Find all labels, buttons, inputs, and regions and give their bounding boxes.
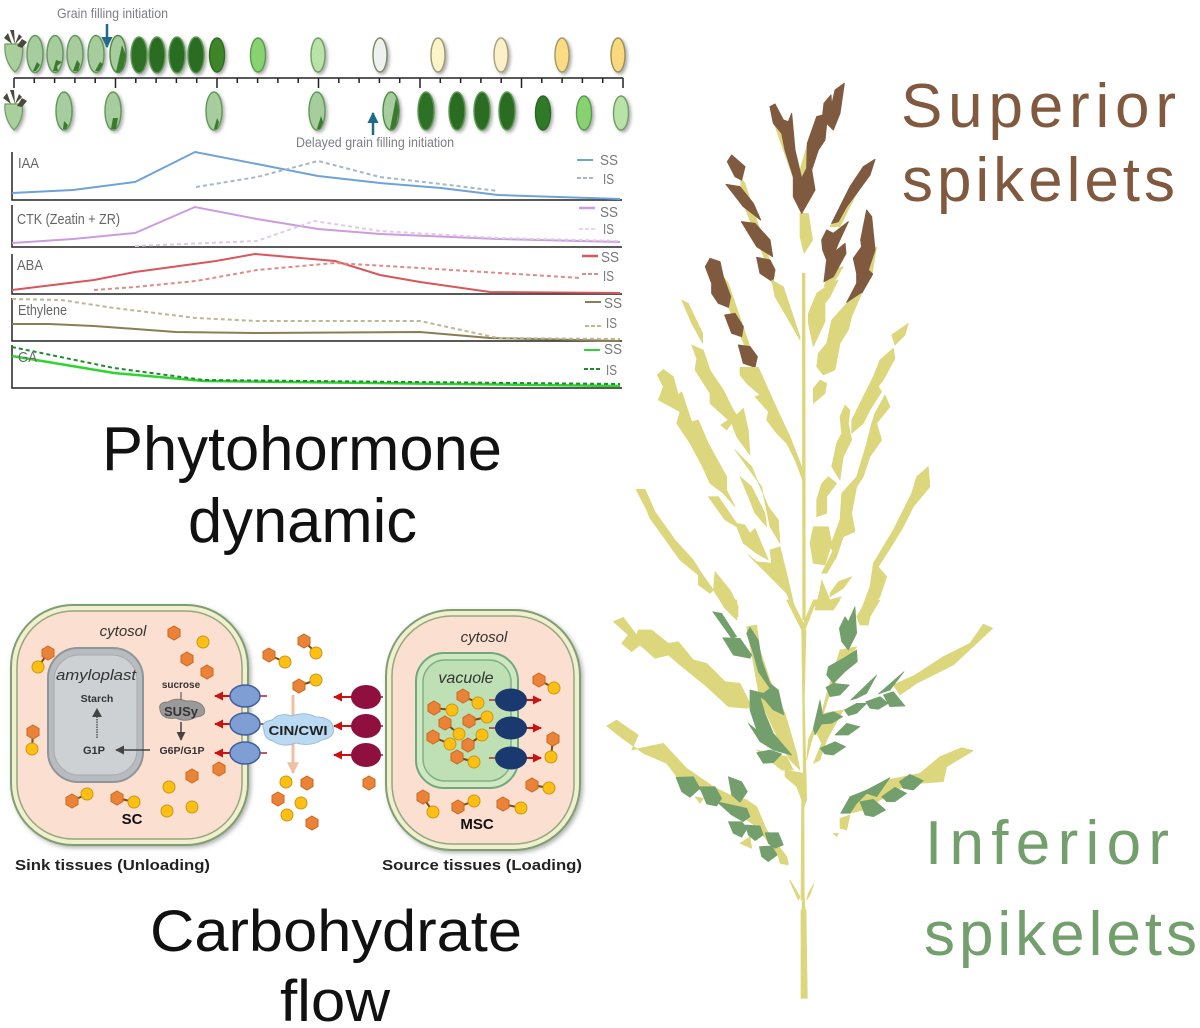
chart: Ethylene: SS	[604, 295, 622, 312]
pathway: starch synthesis: Starch	[81, 693, 113, 705]
chart: GA: SS	[604, 341, 622, 358]
pathway: starch synthesis	[81, 680, 205, 757]
middle yellow branches	[636, 273, 930, 620]
chart: IAA	[12, 152, 622, 200]
bottom row of grains	[56, 92, 628, 130]
molecules in sink cell	[26, 626, 225, 817]
time axis	[14, 78, 623, 88]
caption: sink tissues: Sink tissues (Unloading)	[15, 858, 210, 874]
vacuole transporters	[489, 688, 541, 770]
heading: Carbohydrate flow	[150, 899, 522, 1028]
top row of grains	[27, 36, 625, 73]
green inferior spikelets	[676, 607, 923, 862]
arrow: apoplast flow	[292, 695, 294, 773]
chart: CTK: IS	[603, 221, 614, 238]
heading: Inferior spikelets: spikelets	[924, 900, 1197, 969]
molecules in source cell	[417, 673, 560, 818]
heading: Phytohormone dynamic	[102, 415, 502, 556]
molecules in apoplast	[263, 634, 375, 830]
chart: Ethylene: IS	[606, 315, 617, 332]
heading: Inferior spikelets	[924, 809, 1197, 969]
chart: ABA: IS	[603, 268, 614, 285]
chart: CTK: CTK (Zeatin + ZR)	[17, 211, 120, 228]
chart: IAA: SS	[600, 152, 618, 169]
chart: IAA: IS	[603, 171, 614, 188]
brown superior spikelets	[705, 83, 875, 367]
illustration: rice panicle	[607, 83, 993, 998]
amyloplast: amyloplast	[56, 667, 137, 684]
icon: superior spikelet flower	[4, 30, 27, 72]
sink transporters	[215, 685, 267, 764]
amyloplast	[48, 648, 143, 782]
pathway: starch synthesis: G6P/G1P	[160, 745, 204, 757]
icon: inferior spikelet flower	[3, 90, 27, 130]
label: MSC: MSC	[460, 816, 494, 833]
top row grain fill stains	[33, 45, 126, 72]
arrow: grain filling initiation	[106, 24, 108, 47]
label: grain filling initiation: Grain filling initiation	[57, 5, 168, 21]
panel: grain development timeline	[3, 5, 628, 150]
chart: Ethylene	[12, 295, 622, 341]
vacuole	[416, 653, 518, 788]
panel: sink cell	[11, 605, 248, 845]
chart: Ethylene: Ethylene	[18, 302, 67, 319]
label: delayed grain filling initiation: Delayed grain filling initiation	[296, 134, 454, 150]
chart: ABA: ABA	[17, 257, 43, 274]
vacuole: vacuole	[438, 670, 494, 687]
panel: hormone line charts	[12, 152, 622, 388]
label: cytosol: cytosol	[100, 623, 147, 640]
enzyme cloud: CIN/CWI: CIN/CWI	[268, 723, 328, 738]
heading: Phytohormone dynamic: Phytohormone	[102, 415, 502, 484]
lower yellow branches	[607, 600, 993, 998]
label: cytosol: cytosol	[461, 629, 508, 646]
pathway: starch synthesis: SUSy	[164, 704, 199, 719]
chart: CTK	[12, 204, 622, 247]
chart: IAA: IAA	[18, 155, 39, 172]
arrow: delayed grain filling initiation	[372, 113, 374, 135]
chart: GA	[12, 341, 622, 388]
caption: source tissues: Source tissues (Loading)	[382, 858, 582, 874]
upper panicle rachis behind brown spikelets	[723, 107, 877, 347]
chart: ABA: SS	[601, 249, 619, 266]
chart: GA: GA	[18, 349, 37, 366]
heading: Carbohydrate flow: Carbohydrate	[150, 899, 522, 964]
panel: source cell	[386, 610, 580, 850]
chart: CTK: SS	[600, 204, 618, 221]
pathway: starch synthesis: sucrose	[162, 680, 201, 691]
chart: GA: IS	[606, 362, 617, 379]
heading: Inferior spikelets: Inferior	[925, 809, 1169, 878]
bottom row grain fill stains	[63, 98, 399, 129]
heading: Superior spikelets: spikelets	[902, 146, 1175, 215]
label: SC: SC	[122, 811, 143, 828]
heading: Superior spikelets: Superior	[901, 72, 1176, 141]
panel: carbohydrate flow diagram	[11, 605, 582, 874]
heading: Superior spikelets	[901, 72, 1176, 215]
heading: Phytohormone dynamic: dynamic	[188, 487, 417, 556]
pathway: starch synthesis: G1P	[83, 745, 105, 757]
chart: ABA	[12, 249, 622, 294]
enzyme cloud: CIN/CWI	[263, 714, 334, 745]
source transporters	[334, 685, 383, 767]
